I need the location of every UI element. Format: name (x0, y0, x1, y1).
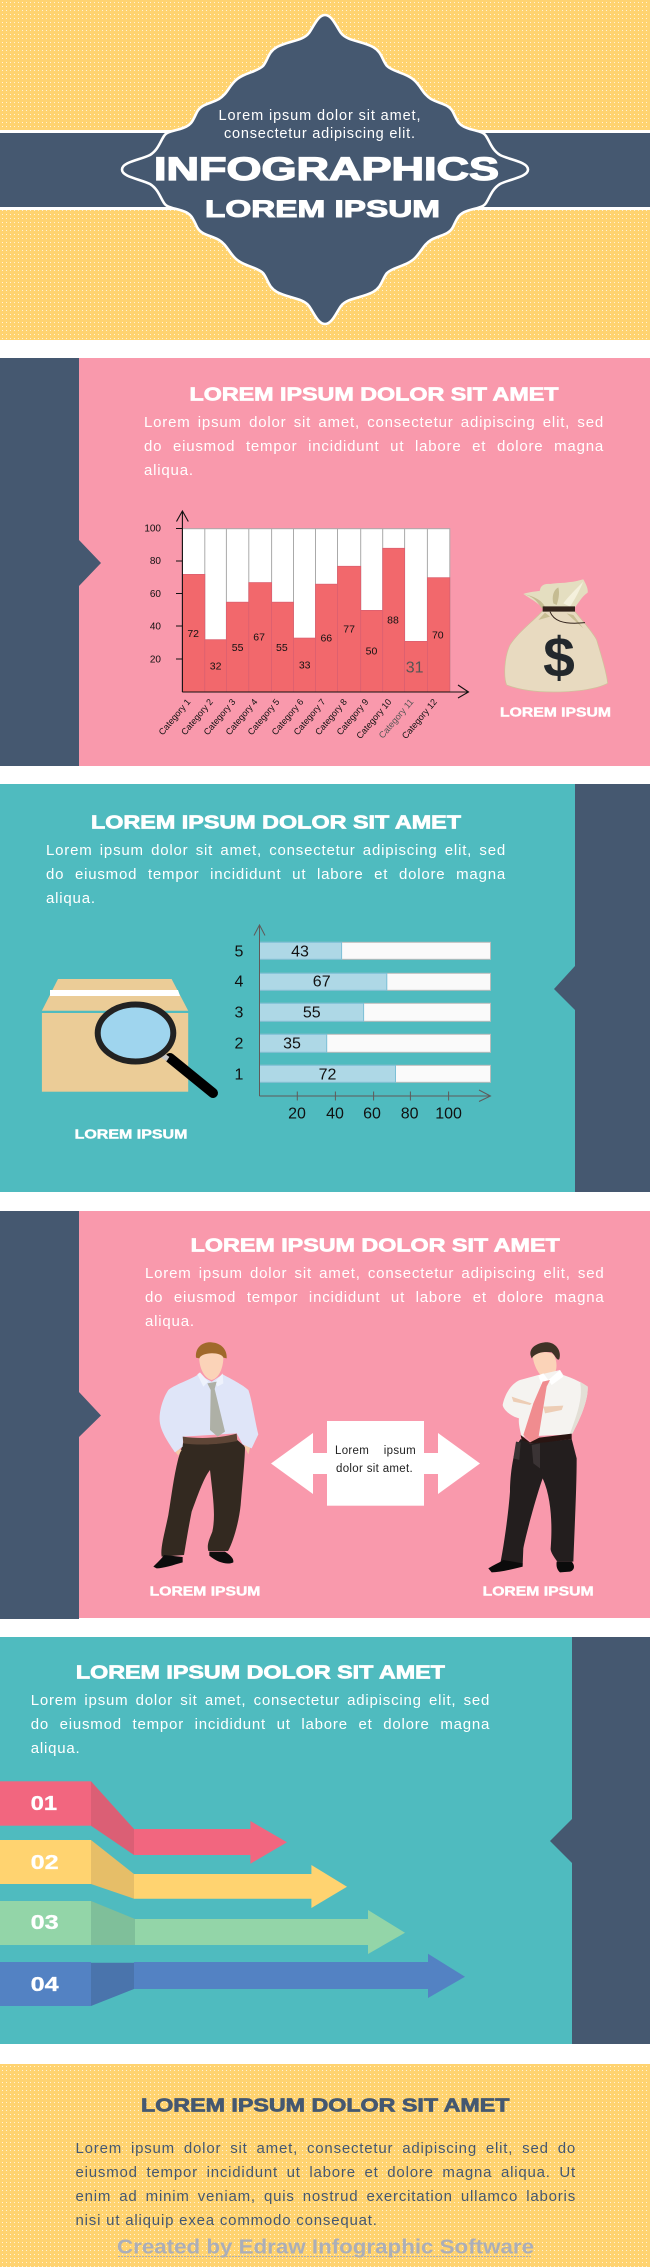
y axis labels: 20 (150, 654, 161, 666)
panel: section 3 comparison (0, 1211, 650, 1619)
section heading: LOREM IPSUM DOLOR SIT AMET (191, 1235, 560, 1255)
category labels: Category 6 (270, 697, 306, 737)
category labels: Category 12 (400, 697, 439, 741)
side rail with arrow (0, 358, 101, 766)
panel: section 4 arrows (0, 1637, 650, 2044)
value labels: 88 (387, 615, 399, 627)
bar categories: 3 (235, 1005, 244, 1022)
paragraph: Lorem ipsum dolor sit amet, consectetur adipiscing elit, sed (144, 414, 604, 431)
x axis labels (288, 1106, 462, 1123)
caption: box: LOREM IPSUM (75, 1127, 187, 1141)
ribbon band (0, 130, 650, 210)
paragraph (145, 1265, 604, 1330)
callout text: Lorem ipsum (335, 1445, 416, 1457)
paragraph: nisi ut aliquip exea commodo consequat. (76, 2212, 378, 2229)
paragraph: Lorem ipsum dolor sit amet, consectetur adipiscing elit, sed (145, 1265, 604, 1282)
side rail with arrow (550, 1637, 650, 2044)
step 02 arrow (0, 1840, 347, 1908)
caption: money bag: LOREM IPSUM (500, 705, 611, 719)
bar categories: 4 (235, 974, 244, 991)
step 03 arrow (0, 1901, 405, 1954)
side rail with arrow (554, 784, 650, 1192)
paragraph (46, 842, 506, 907)
figure: man in white shirt (488, 1342, 588, 1572)
caption: right man: LOREM IPSUM (483, 1584, 594, 1598)
callout text (335, 1445, 416, 1475)
value labels: 55 (276, 642, 288, 654)
step 01 arrow (0, 1781, 287, 1864)
double arrow callout (271, 1421, 480, 1506)
column chart (144, 511, 468, 741)
paragraph: aliqua. (31, 1740, 80, 1757)
category labels: Category 7 (292, 697, 328, 737)
bar categories: 5 (235, 944, 244, 961)
value labels: 72 (187, 628, 199, 640)
value labels: 32 (210, 661, 222, 673)
y axis labels: 40 (150, 622, 161, 632)
panel: footer (0, 2064, 650, 2267)
paragraph: do eiusmod tempor incididunt ut labore et dolore magna (144, 438, 604, 455)
step 02 arrow: 02 (31, 1852, 59, 1874)
paragraph: aliqua. (145, 1313, 195, 1330)
paragraph (144, 414, 604, 479)
value labels: 67 (253, 632, 265, 644)
category labels: Category 4 (224, 697, 260, 737)
bar values: 43 (291, 944, 309, 961)
paragraph: aliqua. (46, 890, 96, 907)
category labels: Category 2 (179, 697, 215, 737)
paragraph: enim ad minim veniam, quis nostrud exercitation ullamco laboris (76, 2188, 576, 2205)
panel: section 2 bar chart (0, 784, 650, 1192)
footer heading: LOREM IPSUM DOLOR SIT AMET (141, 2095, 510, 2115)
value labels: 50 (366, 646, 377, 658)
paragraph: Lorem ipsum dolor sit amet, consectetur adipiscing elit, sed (31, 1692, 490, 1709)
x axis labels: 100 (435, 1106, 462, 1123)
paragraph: aliqua. (144, 462, 194, 479)
bar categories: 2 (235, 1036, 244, 1053)
paragraph: do eiusmod tempor incididunt ut labore et dolore magna (31, 1716, 490, 1733)
x axis labels: 40 (326, 1106, 344, 1123)
category labels: Category 1 (157, 697, 193, 737)
section heading: LOREM IPSUM DOLOR SIT AMET (91, 812, 461, 832)
step 01 arrow: 01 (31, 1793, 57, 1815)
paragraph: Lorem ipsum dolor sit amet, consectetur adipiscing elit, sed do (76, 2140, 576, 2157)
category labels: Category 9 (335, 697, 371, 737)
category labels: Category 3 (202, 697, 238, 737)
y axis labels: 60 (150, 589, 161, 600)
icon: money bag (505, 579, 608, 692)
section heading: LOREM IPSUM DOLOR SIT AMET (190, 384, 559, 404)
bar values: 35 (283, 1036, 301, 1053)
figure: man in blue shirt (153, 1342, 258, 1568)
section heading: LOREM IPSUM DOLOR SIT AMET (76, 1662, 445, 1682)
step 03 arrow: 03 (31, 1912, 59, 1934)
bar chart axes (254, 925, 490, 1102)
header intro text: consectetur adipiscing elit. (224, 126, 415, 142)
value labels: 66 (320, 633, 332, 645)
bar values: 72 (319, 1067, 336, 1084)
step 04 arrow: 04 (31, 1974, 60, 1996)
bar values: 55 (303, 1005, 321, 1022)
caption: left man: LOREM IPSUM (150, 1584, 260, 1598)
step 04 arrow (0, 1954, 465, 2006)
value labels: 77 (343, 624, 355, 636)
bar values (283, 944, 336, 1084)
category labels: Category 5 (246, 697, 282, 737)
paragraph: Lorem ipsum dolor sit amet, consectetur adipiscing elit, sed (46, 842, 506, 859)
panel: header banner (0, 0, 650, 340)
icon: money bag: $ (543, 626, 575, 690)
value labels: 55 (232, 642, 244, 654)
header intro text: Lorem ipsum dolor sit amet, (218, 108, 420, 124)
x axis labels: 80 (401, 1106, 419, 1123)
y axis labels: 80 (150, 556, 161, 567)
paragraph: eiusmod tempor incididunt ut labore et dolore magna aliqua. Ut (76, 2164, 576, 2181)
scalloped diamond badge (122, 15, 528, 324)
value labels: 31 (406, 660, 424, 676)
category labels: Category 8 (313, 697, 349, 737)
x axis labels: 20 (288, 1106, 306, 1123)
watermark: Created by Edraw Infographic Software (117, 2236, 534, 2258)
horizontal bar chart (235, 925, 490, 1123)
y axis labels (144, 524, 161, 666)
y axis labels: 100 (144, 524, 161, 534)
x axis labels: 60 (363, 1106, 381, 1123)
category labels: Category 11 (377, 697, 416, 740)
value labels: 70 (432, 630, 444, 642)
panel: section 1 chart (0, 358, 650, 766)
icon: box with magnifier (42, 979, 213, 1093)
value labels: 33 (299, 660, 311, 672)
category labels: Category 10 (354, 697, 394, 741)
category labels (157, 697, 439, 741)
header intro text (218, 108, 420, 142)
paragraph (76, 2140, 576, 2229)
paragraph: do eiusmod tempor incididunt ut labore et dolore magna (145, 1289, 604, 1306)
callout text: dolor sit amet. (336, 1463, 413, 1475)
side rail with arrow (0, 1211, 101, 1619)
paragraph (31, 1692, 490, 1757)
main title: INFOGRAPHICS (154, 151, 499, 187)
chart axes (176, 511, 468, 698)
subtitle: LOREM IPSUM (205, 196, 440, 223)
value labels (187, 615, 444, 676)
bar categories (235, 944, 244, 1084)
paragraph: do eiusmod tempor incididunt ut labore et dolore magna (46, 866, 506, 883)
bar categories: 1 (235, 1067, 244, 1084)
bar values: 67 (313, 974, 331, 991)
